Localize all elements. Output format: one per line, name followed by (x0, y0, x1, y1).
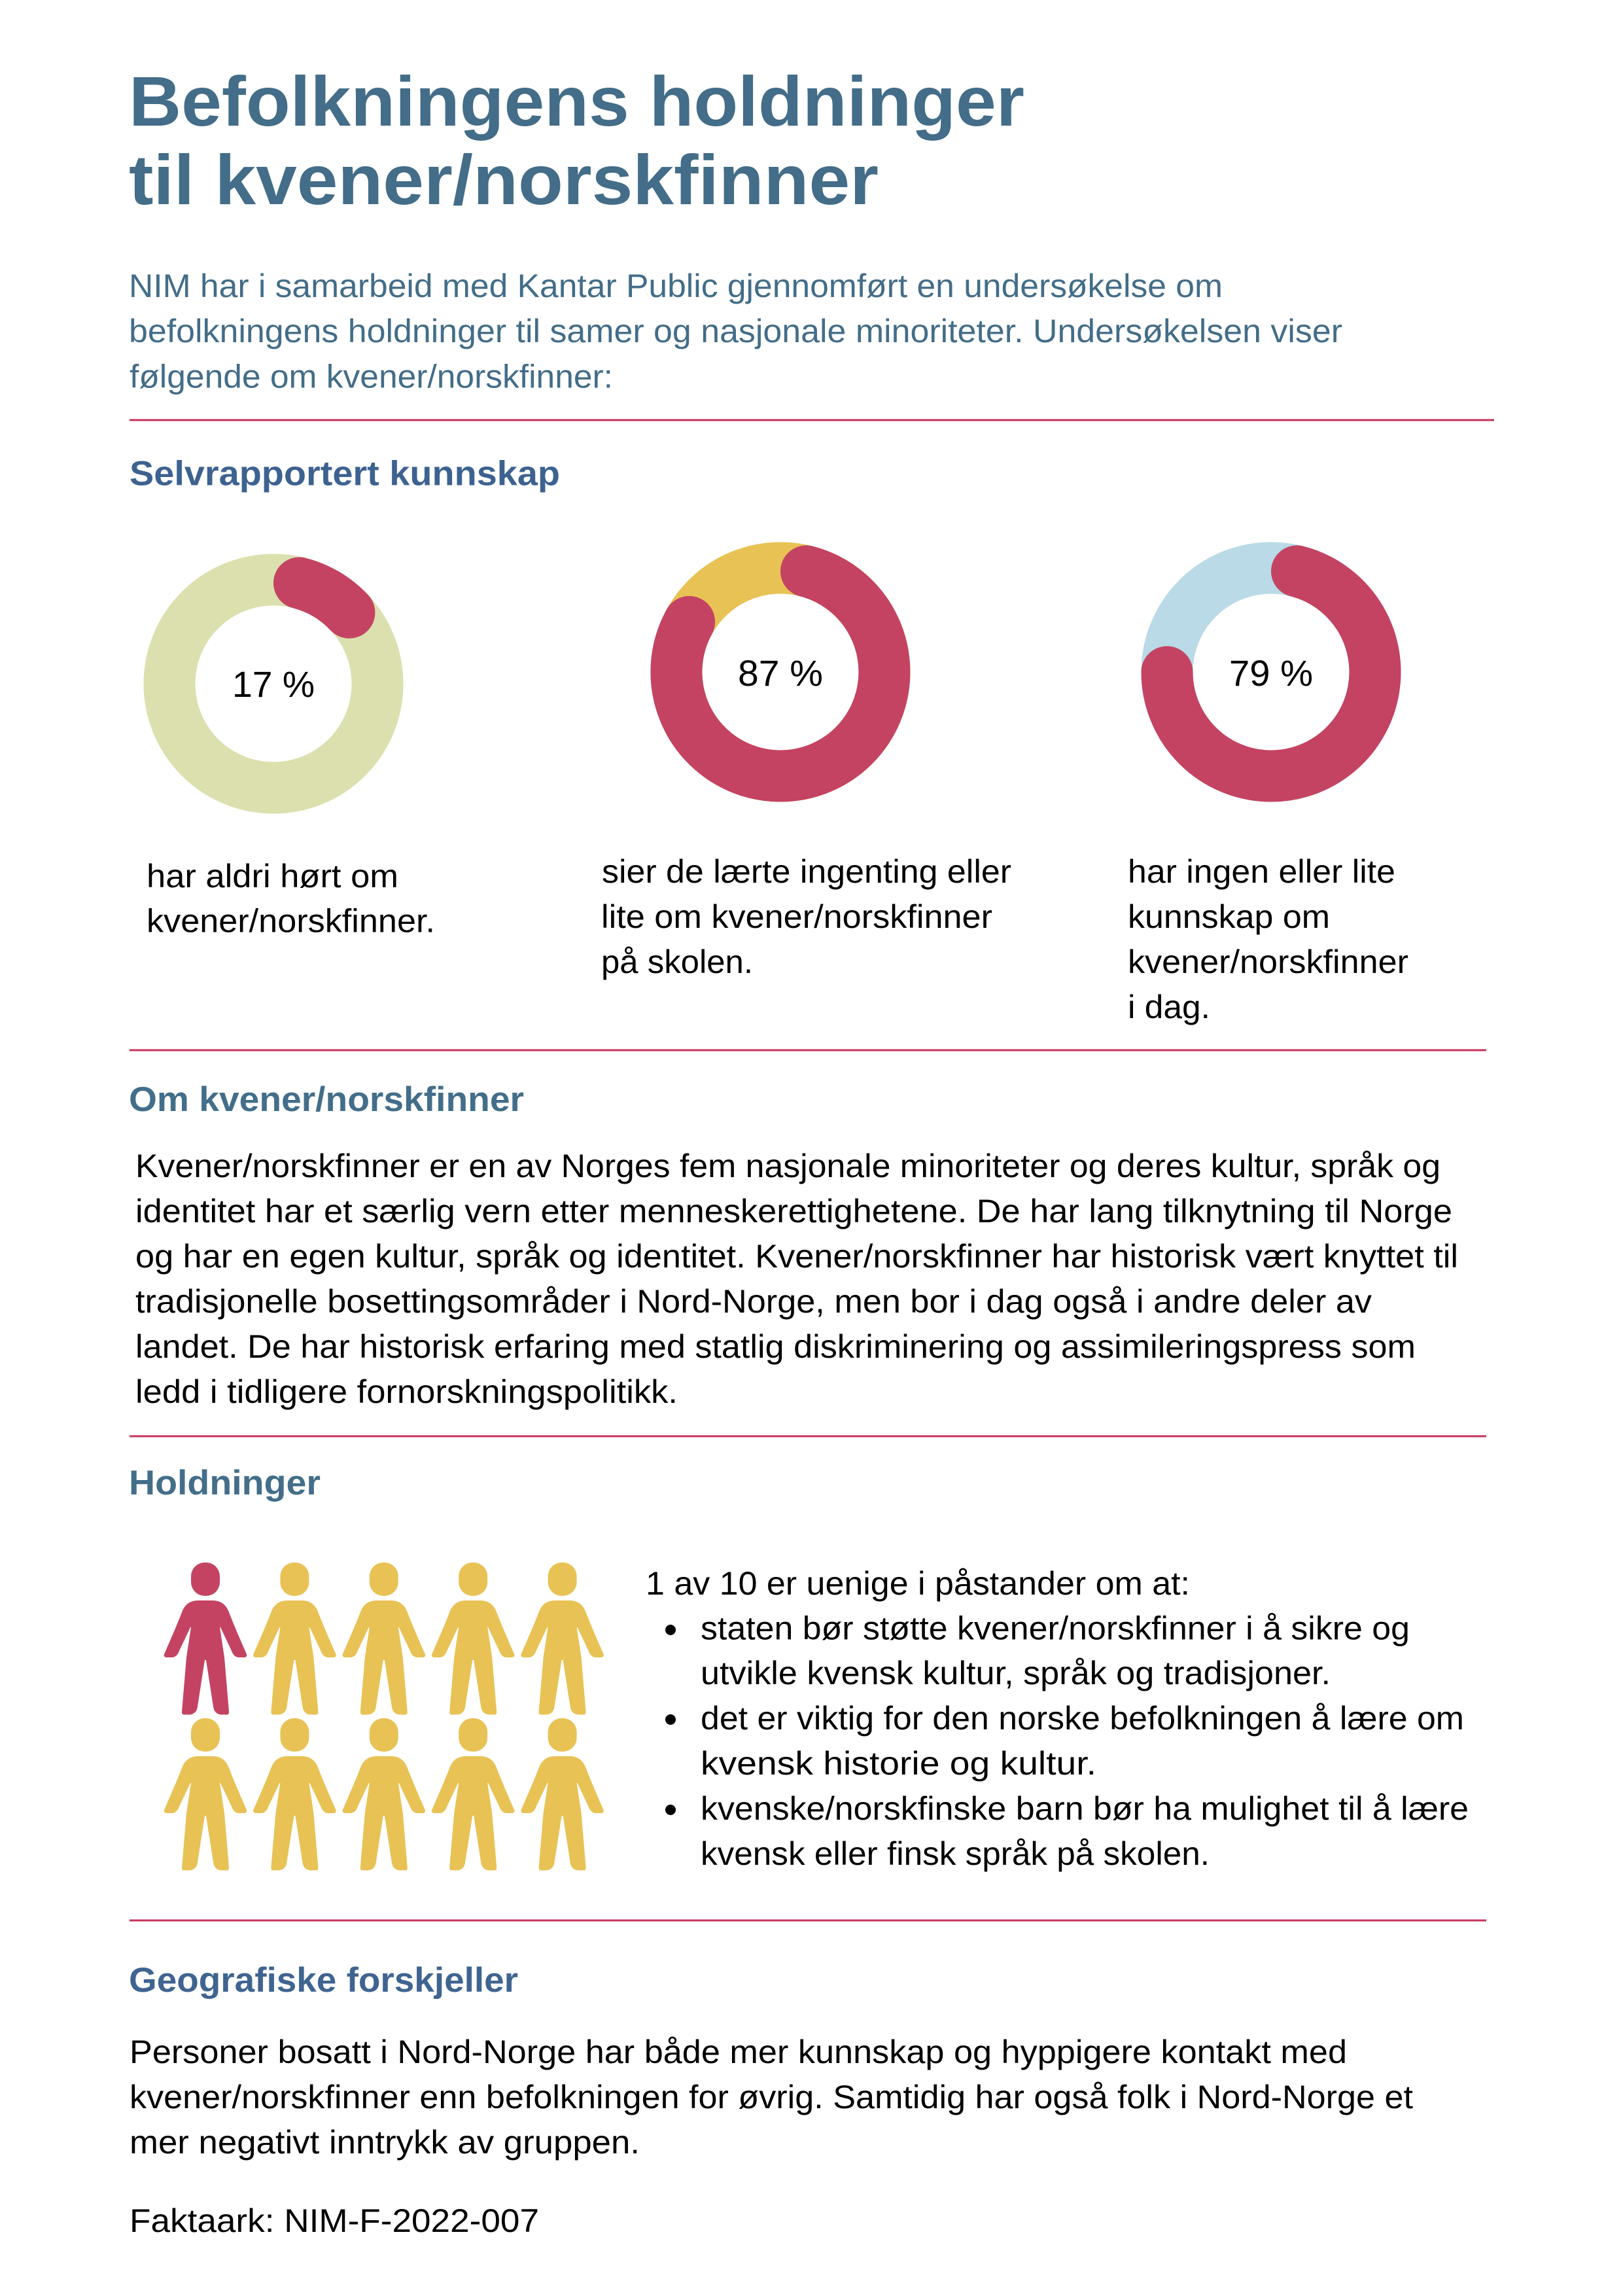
text: attitudes list (646, 1565, 1469, 1872)
caption: 79 %: har ingen eller lite (1128, 853, 1395, 890)
panel: geografiske forskjeller (129, 1961, 1413, 2161)
text: attitudes list: 1 av 10 er uenige i påstander om at: (646, 1565, 1190, 1602)
intro text (129, 268, 1342, 395)
intro text: NIM har i samarbeid med Kantar Public gjennomført en undersøkelse om (129, 268, 1223, 304)
body text: om kvener/norskfinner: ledd i tidligere fornorskningspolitikk. (135, 1373, 678, 1410)
donut chart: 87 % (676, 568, 884, 776)
text: attitudes list: det er viktig for den norske befolkningen å lære om (701, 1700, 1464, 1737)
caption: 87 %: lite om kvener/norskfinner (601, 898, 992, 935)
footer: document reference: Faktaark: NIM-F-2022-007 (130, 2202, 539, 2239)
title: til kvener/norskfinner (129, 140, 879, 219)
panel: selvrapportert kunnskap (130, 454, 1408, 1025)
intro text: befolkningens holdninger til samer og nasjonale minoriteter. Undersøkelsen viser (129, 313, 1342, 349)
heading: geografiske forskjeller: Geografiske forskjeller (129, 1961, 518, 2000)
pictogram: 1 av 10 people (164, 1563, 604, 1870)
caption: 79 % (1128, 853, 1408, 1025)
caption: 79 %: kvener/norskfinner (1128, 944, 1408, 980)
body text: geografiske forskjeller: kvener/norskfinner enn befolkningen for øvrig. Samtidig har også folk i Nord-Norge et (130, 2079, 1413, 2115)
caption: 79 %: i dag. (1128, 989, 1210, 1025)
text: attitudes list: kvensk eller finsk språk på skolen. (701, 1835, 1210, 1872)
body text: geografiske forskjeller (130, 2034, 1413, 2161)
text: attitudes list: kvensk historie og kultur. (701, 1745, 1096, 1782)
title (129, 62, 1024, 219)
text: attitudes list: utvikle kvensk kultur, språk og tradisjoner. (701, 1655, 1331, 1691)
panel: holdninger (129, 1464, 1469, 1872)
text: attitudes list: staten bør støtte kvener/norskfinner i å sikre og (701, 1610, 1410, 1646)
caption: 17 % (147, 858, 435, 940)
intro text: følgende om kvener/norskfinner: (130, 359, 613, 395)
body text: om kvener/norskfinner: Kvener/norskfinner er en av Norges fem nasjonale minoriteter og deres kultur, språk og (135, 1148, 1440, 1184)
caption: 87 %: sier de lærte ingenting eller (602, 853, 1011, 890)
body text: geografiske forskjeller: Personer bosatt i Nord-Norge har både mer kunnskap og hyppigere kontakt med (130, 2034, 1347, 2070)
caption: 79 %: kunnskap om (1128, 898, 1330, 935)
body text: geografiske forskjeller: mer negativt inntrykk av gruppen. (130, 2124, 640, 2161)
donut chart: 17 %: 17 % (232, 663, 315, 705)
panel: om kvener/norskfinner (129, 1080, 1458, 1410)
heading: selvrapportert kunnskap: Selvrapportert kunnskap (130, 454, 560, 493)
body text: om kvener/norskfinner: identitet har et særlig vern etter menneskerettighetene. De har lang tilknytning til Norge (135, 1193, 1452, 1229)
body text: om kvener/norskfinner: landet. De har historisk erfaring med statlig diskriminering og assimileringspress som (135, 1328, 1416, 1365)
heading: om kvener/norskfinner: Om kvener/norskfinner (129, 1080, 524, 1119)
donut chart: 87 %: 87 % (738, 652, 823, 694)
heading: holdninger: Holdninger (129, 1464, 321, 1502)
body text: om kvener/norskfinner: tradisjonelle bosettingsområder i Nord-Norge, men bor i dag også i andre deler av (135, 1283, 1372, 1320)
donut chart: 17 % (169, 580, 377, 788)
text: attitudes list: kvenske/norskfinske barn bør ha mulighet til å lære (701, 1790, 1469, 1827)
caption: 87 % (601, 853, 1011, 980)
caption: 17 %: kvener/norskfinner. (147, 903, 435, 940)
body text: om kvener/norskfinner: og har en egen kultur, språk og identitet. Kvener/norskfinner har historisk vært knyttet til (135, 1238, 1458, 1275)
caption: 87 %: på skolen. (601, 944, 753, 980)
title: Befolkningens holdninger (129, 62, 1024, 141)
caption: 17 %: har aldri hørt om (147, 858, 398, 894)
donut chart: 79 %: 79 % (1229, 652, 1313, 694)
body text: om kvener/norskfinner (135, 1148, 1458, 1410)
donut chart: 79 % (1167, 568, 1375, 776)
